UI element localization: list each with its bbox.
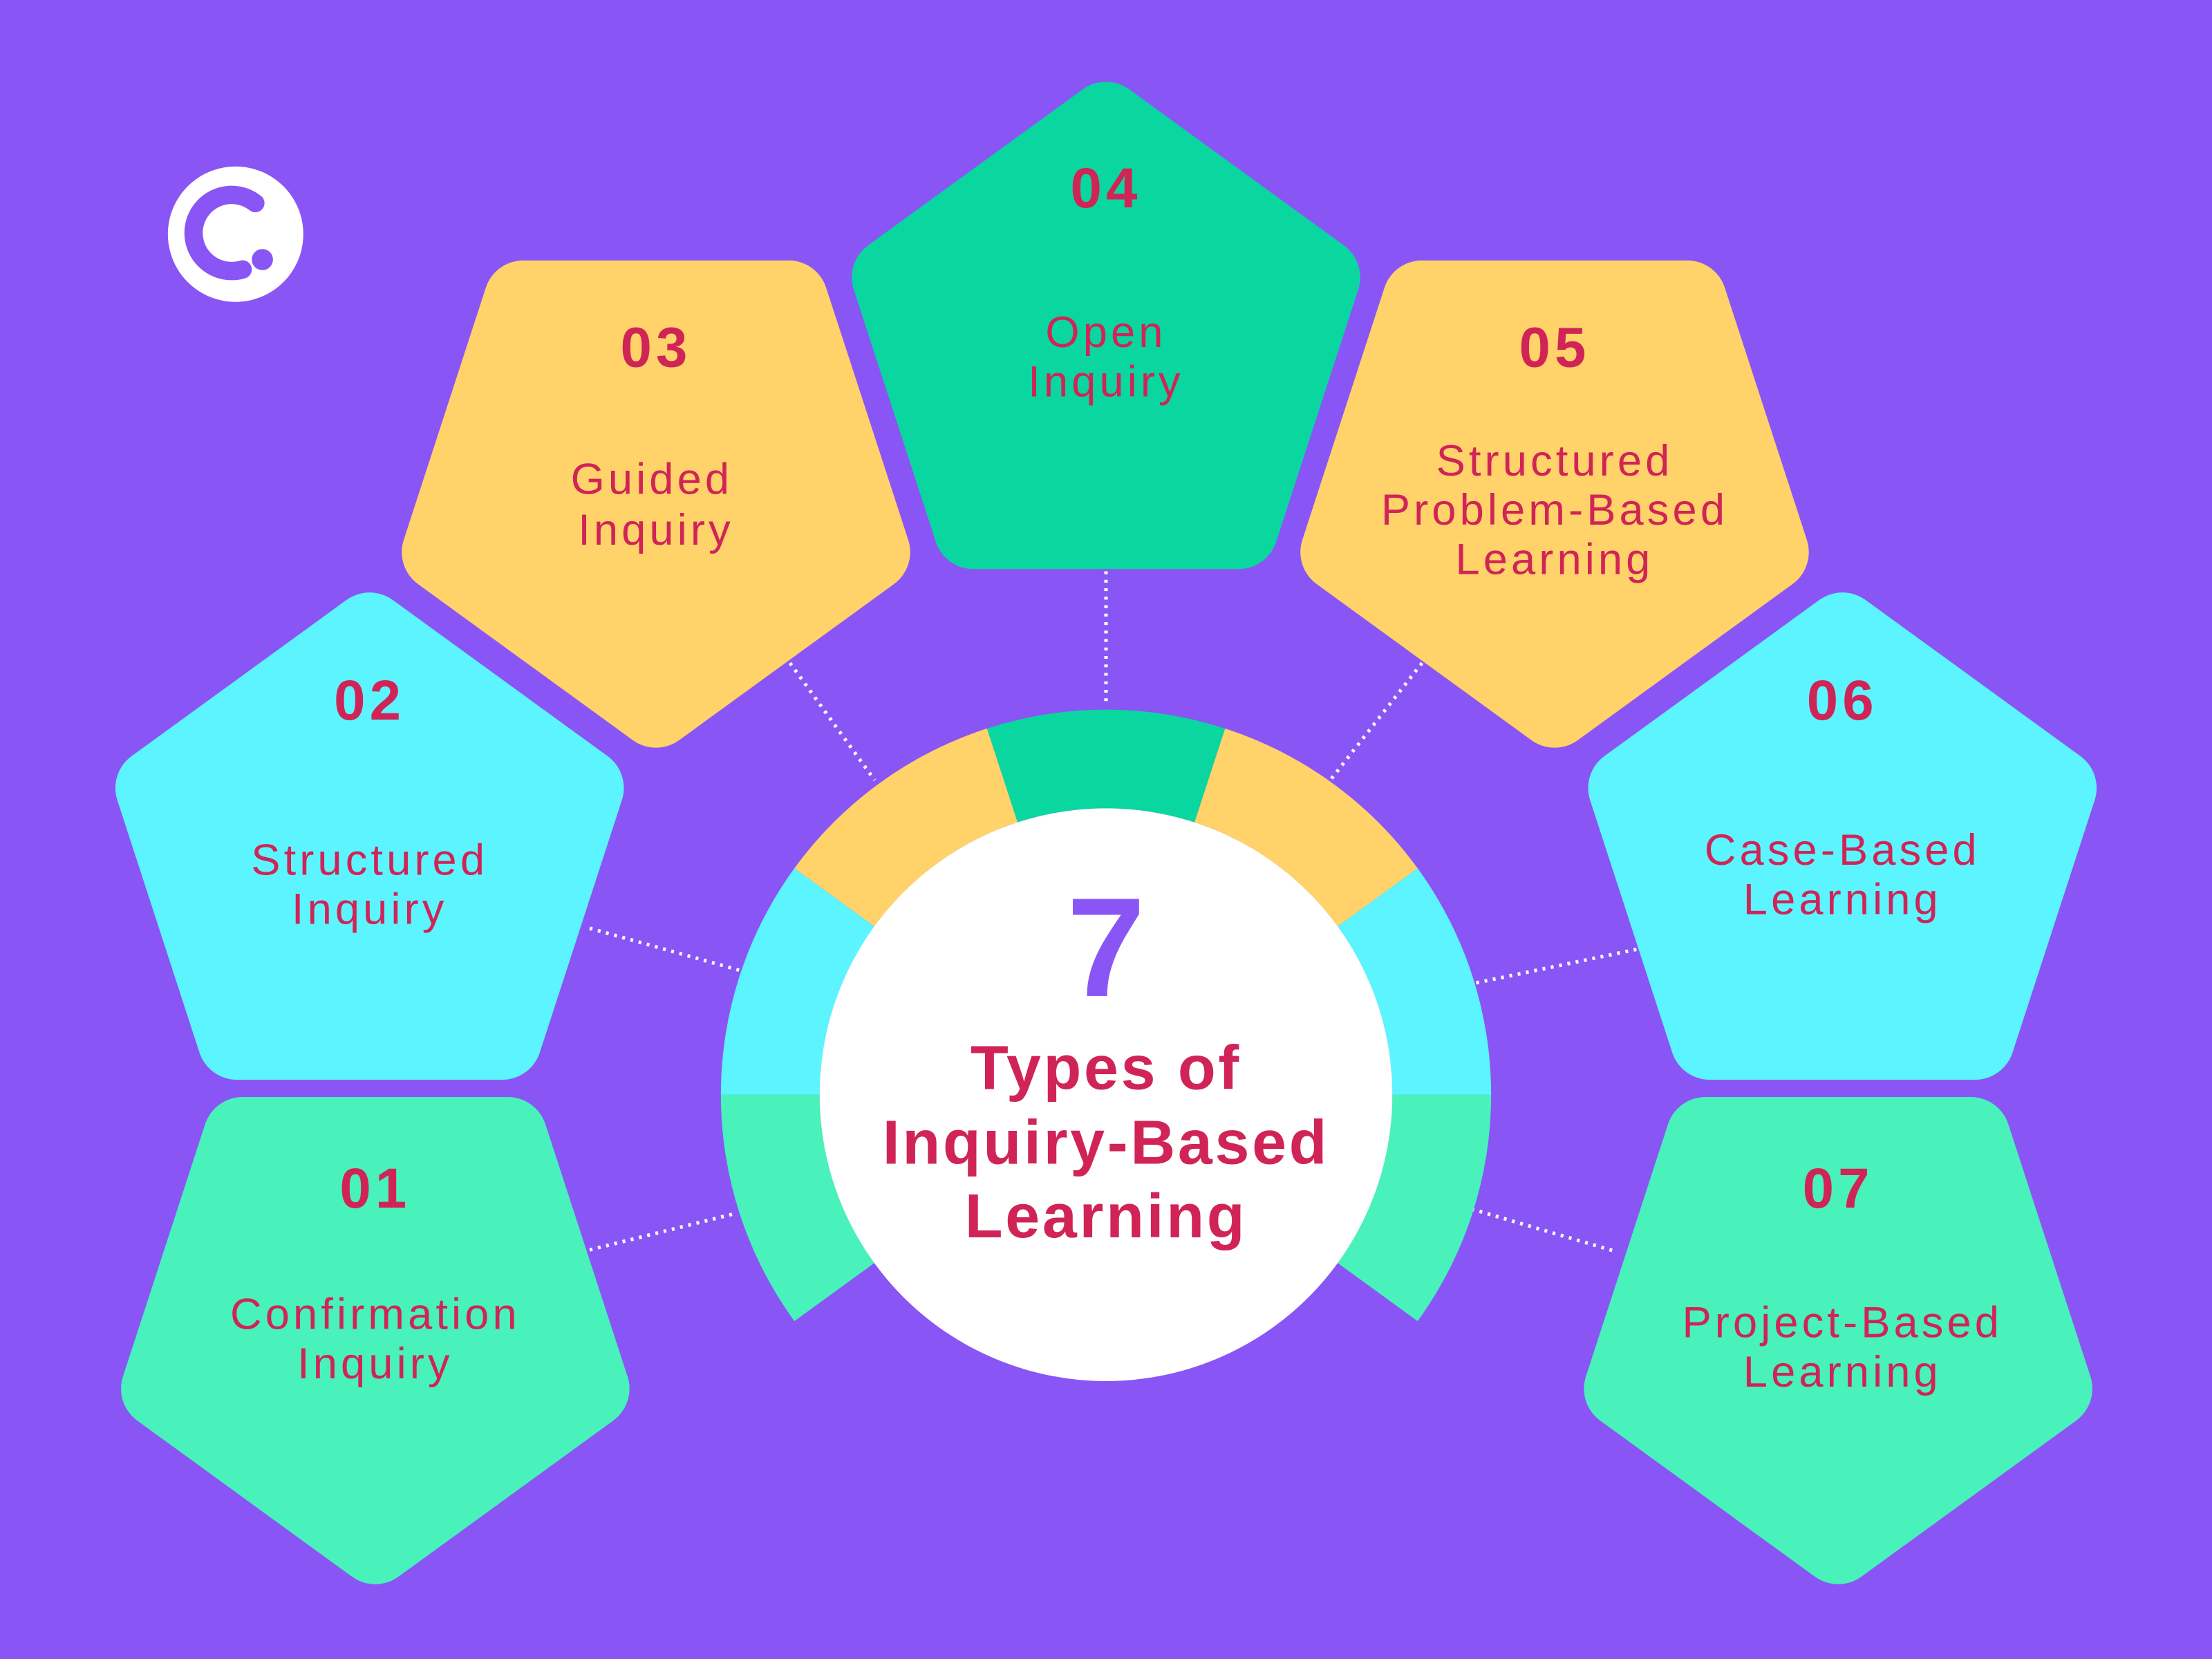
panel: 04 Open Inquiry: 04 [1070,157,1142,220]
panel: 05 Structured Problem-Based Learning: Structured [1436,437,1673,485]
panel: 01 Confirmation Inquiry: Confirmation [230,1290,521,1338]
center circle title: Types of [971,1034,1241,1103]
panel: 01 Confirmation Inquiry: Inquiry [297,1340,453,1388]
icon: logo [168,167,303,302]
center circle title [820,808,1392,1381]
panel: 01 Confirmation Inquiry [160,1136,590,1545]
center circle title: 7 [1067,869,1145,1027]
panel: 06 Case-Based Learning: 06 [1807,669,1878,732]
panel: 06 Case-Based Learning [1628,632,2057,1040]
panel: 03 Guided Inquiry [441,300,871,708]
panel: 07 Project-Based Learning: 07 [1803,1157,1874,1220]
center circle title: Learning [965,1182,1247,1251]
panel: 02 Structured Inquiry: Inquiry [292,885,447,934]
panel: 02 Structured Inquiry [155,632,584,1040]
panel: 03 Guided Inquiry: Guided [571,455,733,503]
panel: 04 Open Inquiry: Inquiry [1028,357,1184,406]
panel: 07 Project-Based Learning: Project-Based [1683,1299,2003,1347]
panel: 05 Structured Problem-Based Learning: Problem-Based [1381,486,1728,534]
panel: 06 Case-Based Learning: Case-Based [1705,826,1980,874]
panel: 05 Structured Problem-Based Learning: 05 [1519,317,1591,379]
connector lines [590,572,1636,1251]
panel: 02 Structured Inquiry: 02 [334,669,405,732]
chart: segmented ring [721,710,1491,1321]
panel: 06 Case-Based Learning: Learning [1743,875,1942,924]
panel: 04 Open Inquiry [891,122,1321,529]
panel: 02 Structured Inquiry: Structured [251,836,488,884]
panel: 05 Structured Problem-Based Learning: Learning [1455,536,1653,584]
panel: 04 Open Inquiry: Open [1045,308,1167,357]
panel: 07 Project-Based Learning: Learning [1743,1348,1942,1396]
panel: 03 Guided Inquiry: Inquiry [578,506,734,554]
panel: 01 Confirmation Inquiry: 01 [339,1157,411,1220]
panel: 05 Structured Problem-Based Learning [1340,300,1770,708]
panel: 07 Project-Based Learning [1624,1136,2053,1545]
center circle title: Inquiry-Based [883,1109,1329,1178]
panel: 03 Guided Inquiry: 03 [620,317,692,379]
